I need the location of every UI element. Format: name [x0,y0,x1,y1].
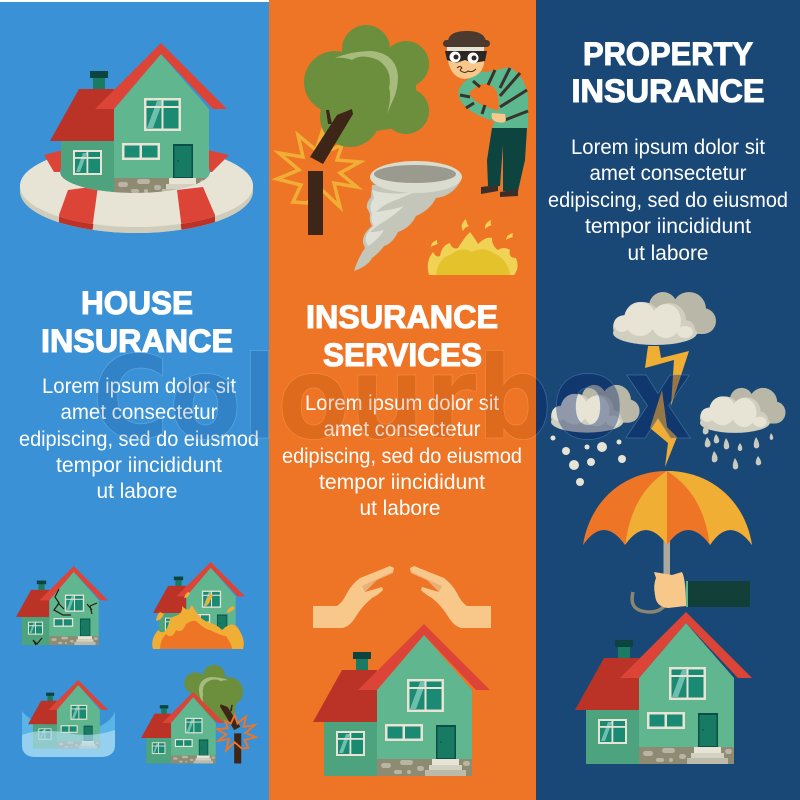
panel: insurance services [269,0,536,800]
text block: house insurance: tempor iincididunt [56,454,222,477]
text block: insurance services: tempor iincididunt [319,471,485,494]
text block: insurance services: amet consectetur [324,418,480,441]
icon: house on life ring [20,43,253,235]
heading: property insurance: PROPERTY [583,36,753,72]
icon: burglar [443,31,528,197]
text block: insurance services: ut labore [360,497,440,520]
icon: tornado [354,161,462,271]
icon: flooded house [22,680,115,757]
text block: property insurance: Lorem ipsum dolor sit [571,136,765,159]
panel: property insurance [536,0,800,800]
heading: property insurance [572,36,764,109]
heading: insurance services: INSURANCE [306,299,498,335]
icon: cracked house [16,566,108,645]
icon: rain cloud [700,388,785,470]
icon: hail cloud [550,385,640,486]
icon: house [575,612,752,764]
text block: house insurance [19,375,259,503]
icon: fire [428,219,518,275]
icon: lightning bolt [645,346,689,467]
heading: house insurance [41,285,233,359]
icon: house hit by tree [141,665,256,763]
heading: house insurance: HOUSE [81,285,193,321]
text block: property insurance: ut labore [628,242,708,265]
icon: hand holding umbrella [632,572,750,612]
panel: house insurance [0,2,269,800]
icon: burning house [152,562,245,649]
text block: property insurance: tempor iincididunt [585,215,751,238]
icon: protecting hands [313,566,491,628]
heading: property insurance: INSURANCE [572,73,764,109]
text block: house insurance: amet consectetur [60,401,218,424]
icon: tree struck by lightning [277,25,429,235]
heading: house insurance: INSURANCE [41,323,233,359]
heading: insurance services: SERVICES [323,337,482,373]
text block: house insurance: ut labore [96,480,178,503]
text block: property insurance: edipiscing, sed do eiusmod [548,189,788,212]
heading: insurance services [306,299,498,373]
text block: house insurance: Lorem ipsum dolor sit [42,375,236,398]
icon: house [313,624,490,776]
text block: property insurance: amet consectetur [590,162,746,185]
text block: insurance services [282,392,522,520]
icon: storm cloud [613,292,716,345]
text block: insurance services: edipiscing, sed do eiusmod [282,445,522,468]
text block: property insurance [548,136,788,265]
text block: insurance services: Lorem ipsum dolor sit [305,392,499,415]
watermark: Colourbox [92,332,692,466]
icon: umbrella [583,471,752,575]
text block: house insurance: edipiscing, sed do eiusmod [19,428,259,451]
